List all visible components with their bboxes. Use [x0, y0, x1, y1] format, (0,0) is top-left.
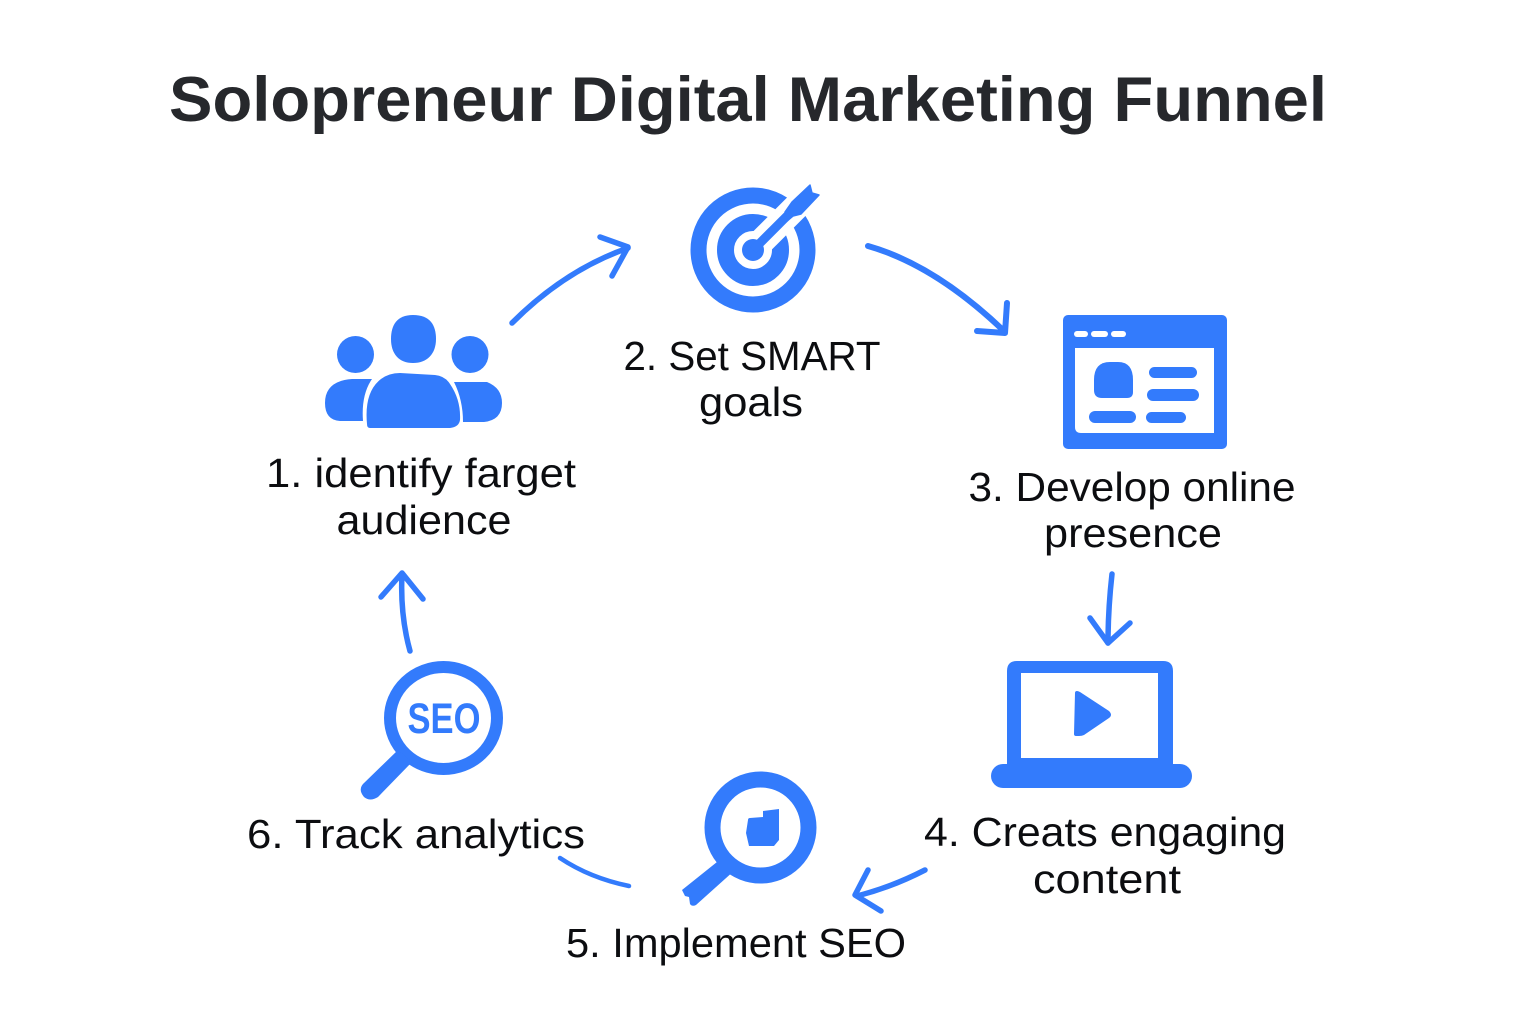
arrow: 6 to 1	[381, 573, 423, 651]
arrow: 5 to 6	[560, 858, 629, 886]
icon: audience group	[325, 315, 502, 428]
title: Solopreneur Digital Marketing Funnel	[169, 65, 1327, 135]
arrow: 1 to 2	[512, 237, 628, 323]
arrow: 2 to 3	[868, 246, 1007, 333]
arrow: 4 to 5	[855, 870, 925, 911]
icon: SEO magnifier	[361, 667, 497, 800]
label: step 4: content	[1033, 856, 1182, 902]
label: step 4: 4. Creats engaging	[924, 809, 1286, 855]
icon: laptop with play	[991, 661, 1192, 788]
label: step 2: 2. Set SMART	[624, 333, 880, 379]
label: step 3: presence	[1044, 510, 1222, 556]
label: step 1: 1. identify farget	[266, 450, 577, 496]
arrow: 3 to 4	[1090, 574, 1130, 643]
icon: SEO magnifier: SEO	[408, 695, 480, 743]
icon: magnifier	[682, 780, 808, 906]
icon: target	[698, 185, 819, 304]
label: step 2: goals	[699, 379, 803, 425]
label: step 5: 5. Implement SEO	[566, 920, 906, 966]
label: step 3: 3. Develop online	[968, 464, 1296, 510]
label: step 1: audience	[336, 497, 512, 543]
label: step 6: 6. Track analytics	[247, 811, 585, 857]
icon: browser window	[1063, 315, 1227, 449]
